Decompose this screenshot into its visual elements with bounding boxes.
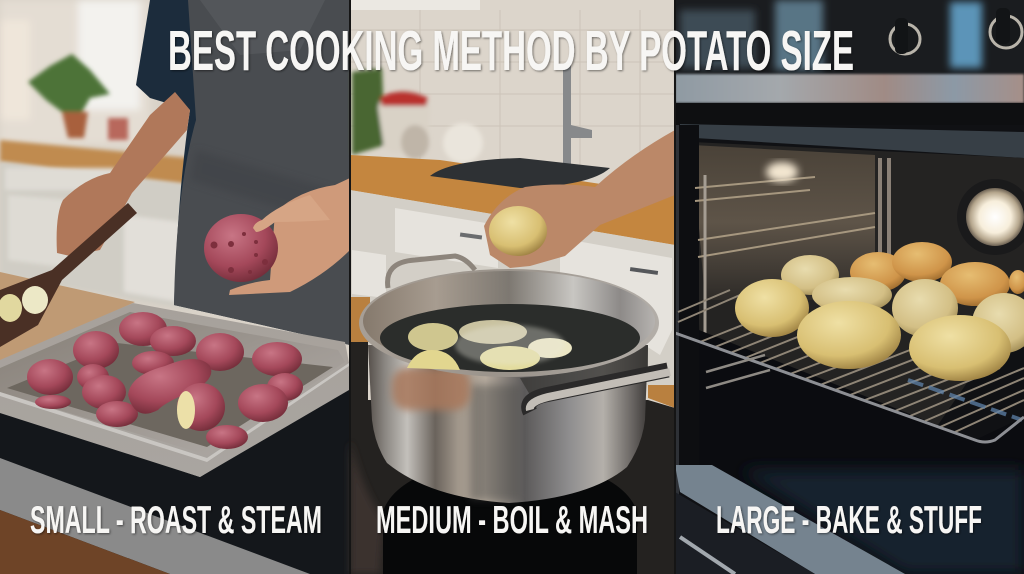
boiling potatoes in pot (407, 320, 572, 370)
right hand holding potato (229, 178, 350, 295)
shelf items: plant, red lid jar, white jug (352, 68, 483, 163)
baked potatoes on rack (735, 242, 1024, 381)
left forearm and hand (57, 92, 190, 256)
oven rack (675, 290, 1024, 442)
pot front handle (529, 370, 670, 412)
wooden counter (0, 140, 190, 185)
bottom oven door (675, 465, 905, 574)
panel: medium potatoes (350, 0, 675, 574)
small red potatoes on tray (27, 312, 303, 449)
white cabinets (350, 190, 675, 385)
forearm and hand holding potato (484, 130, 675, 268)
oven control knobs (890, 8, 1022, 54)
burner ring (382, 458, 638, 574)
stove top (0, 385, 350, 574)
tiled wall (350, 10, 675, 170)
wooden spatula (0, 203, 137, 347)
oven lamp (957, 179, 1024, 255)
plant on the counter (28, 54, 128, 140)
label: medium potatoes: MEDIUM - BOIL & MASH (376, 499, 648, 542)
glass reflections (680, 0, 982, 70)
label: small potatoes: SMALL - ROAST & STEAM (30, 499, 322, 542)
red potato held in hand (204, 214, 278, 282)
oven interior (692, 142, 1024, 480)
door frame band (680, 124, 1024, 158)
cooktop (350, 342, 675, 574)
panel: small potatoes (0, 0, 350, 574)
dark lower cavity (699, 330, 1024, 574)
pot back handle (388, 256, 475, 288)
panel dividers (349, 0, 676, 574)
oven handle bar (675, 74, 1024, 103)
person: shirt and apron (136, 0, 350, 345)
oven control panel (675, 0, 1024, 74)
pot (359, 269, 659, 503)
counter and sink (350, 155, 675, 245)
cut potatoes on spatula (0, 286, 48, 322)
thumb over potato (253, 195, 330, 232)
white cabinets (0, 162, 190, 310)
panel: large potatoes (675, 0, 1024, 574)
left countertop (0, 272, 135, 365)
yellow potato in hand (489, 206, 547, 256)
lower counters (350, 297, 675, 408)
kitchen wall and window (0, 0, 150, 145)
oven rails and highlights (695, 158, 889, 410)
baking tray (0, 303, 349, 477)
faucet (563, 65, 592, 165)
